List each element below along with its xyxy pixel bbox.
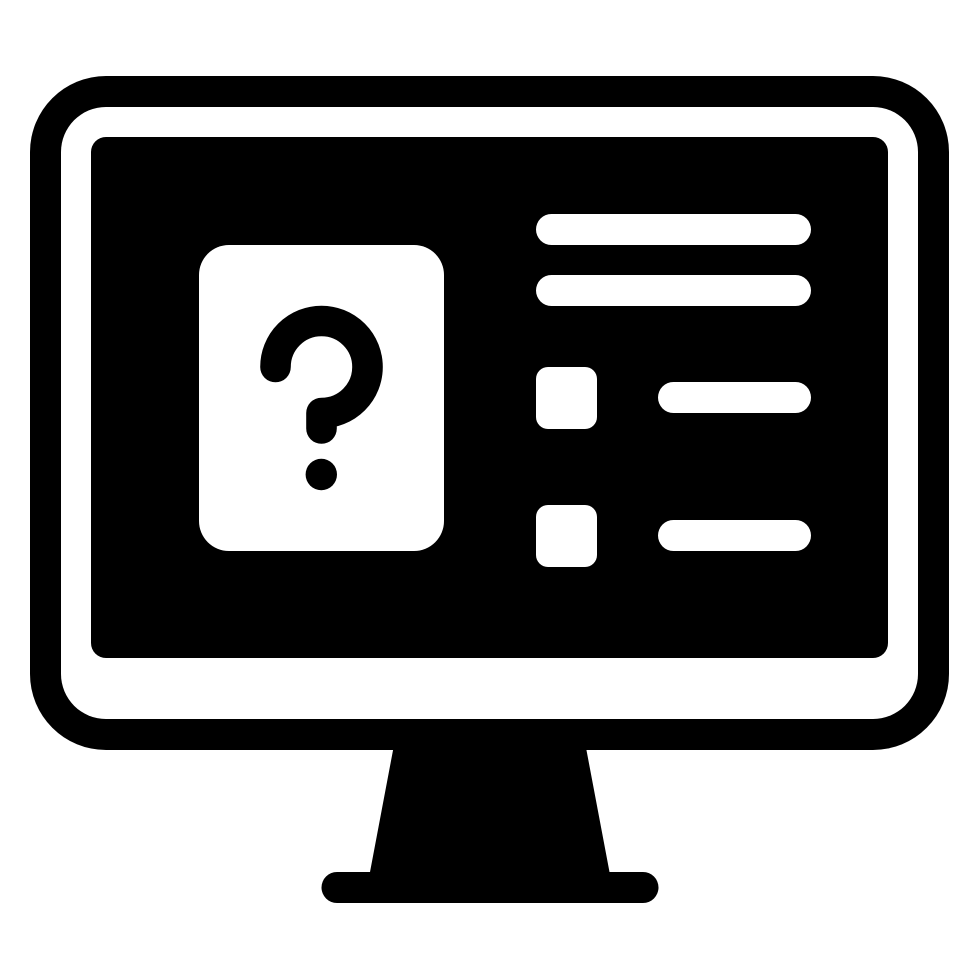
text lines <box>536 214 811 306</box>
screen panel <box>91 137 888 658</box>
answer option 1 <box>536 367 811 429</box>
answer option 2 <box>536 505 811 567</box>
monitor outer frame <box>30 76 949 750</box>
question card <box>199 245 444 551</box>
monitor stand <box>322 745 658 903</box>
icon: question mark <box>276 321 368 490</box>
